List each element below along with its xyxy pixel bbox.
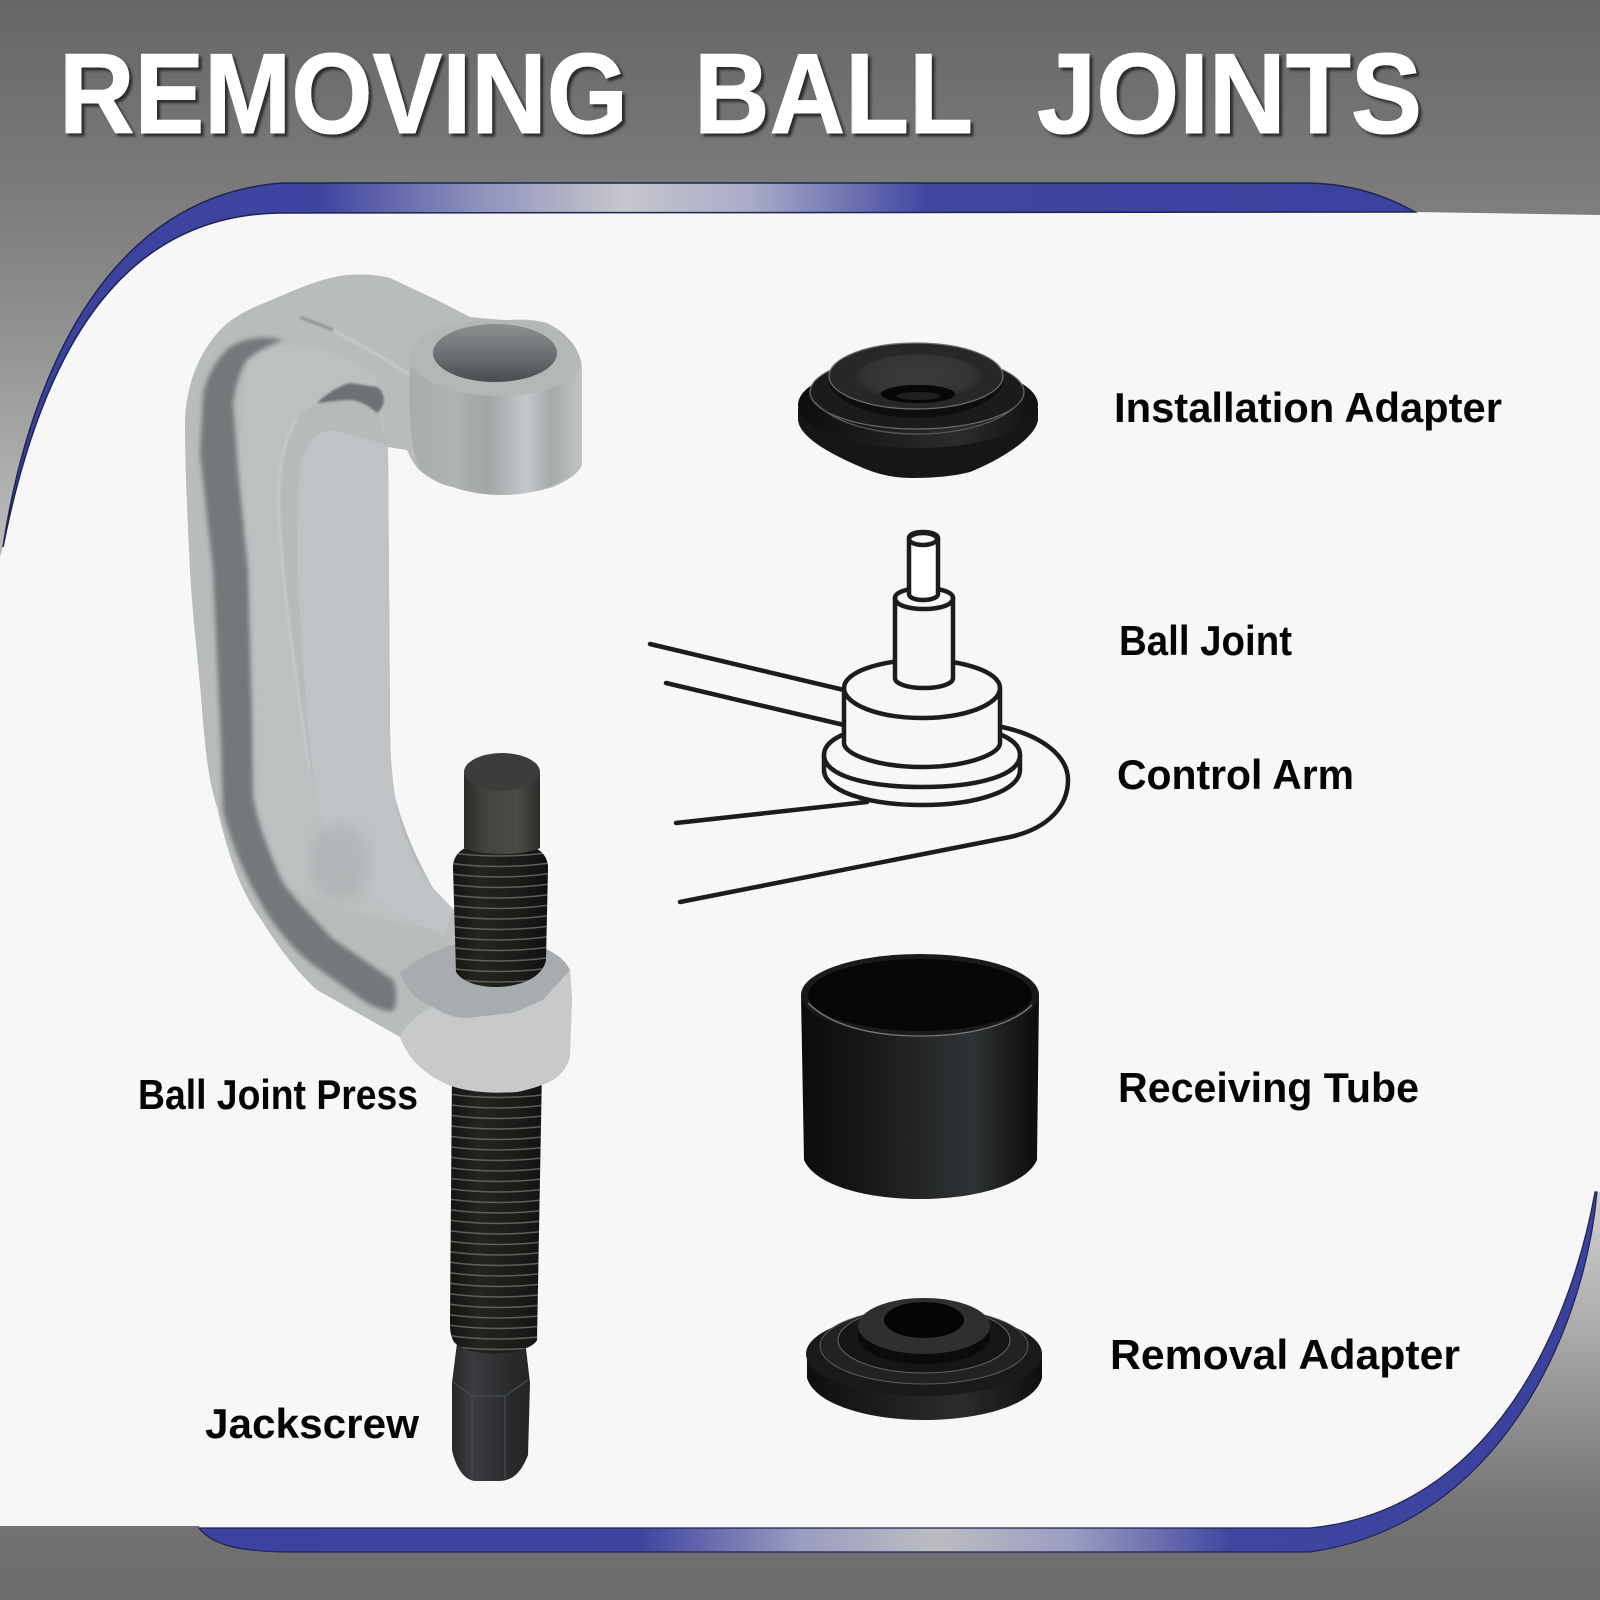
rib <box>279 400 433 888</box>
notch <box>317 383 384 413</box>
jackscrew: lower shaft and hex end <box>450 1070 542 1481</box>
screw hex end <box>452 1335 530 1481</box>
lower boss front <box>400 970 572 1093</box>
pin <box>909 532 938 600</box>
crease <box>279 420 310 770</box>
worn patch <box>314 828 368 895</box>
upper boss top <box>413 332 582 396</box>
second step <box>810 355 1024 429</box>
lower threaded shaft <box>450 1070 542 1354</box>
bottom blue swoosh band <box>199 1192 1597 1552</box>
center hole <box>881 385 955 403</box>
part: removal adapter <box>806 1298 1042 1420</box>
ball joint press: C-clamp frame <box>185 274 582 1093</box>
title <box>59 31 1422 158</box>
bolt hole <box>433 324 557 382</box>
lower boss top face <box>400 940 570 1018</box>
top ridge <box>300 317 333 330</box>
control arm lines <box>650 644 1068 902</box>
web face <box>388 466 429 880</box>
cone recess <box>855 354 983 402</box>
label: installation adapter: Installation Adapter <box>1114 384 1502 431</box>
neck <box>895 588 953 688</box>
outer groove <box>200 338 396 1011</box>
upper boss side <box>410 365 582 495</box>
center hole <box>884 1302 964 1338</box>
top blue swoosh band <box>3 183 1415 547</box>
title: JOINTS <box>1037 31 1422 158</box>
diagram: ball joint and control arm <box>650 532 1068 902</box>
top ring <box>858 1298 990 1354</box>
middle disc <box>844 660 1000 767</box>
label: ball joint press: Ball Joint Press <box>138 1071 418 1118</box>
part: installation adapter <box>798 343 1038 478</box>
label: removal adapter: Removal Adapter <box>1110 1331 1460 1378</box>
screw tip face <box>464 753 540 791</box>
base rim <box>798 362 1038 448</box>
label: ball joint: Ball Joint <box>1119 617 1292 664</box>
part: receiving tube <box>801 954 1039 1199</box>
label: receiving tube: Receiving Tube <box>1118 1064 1419 1111</box>
inner face <box>297 430 453 935</box>
label: control arm: Control Arm <box>1117 751 1354 798</box>
screw tip side <box>464 772 540 854</box>
title: BALL <box>694 31 973 158</box>
title: REMOVING <box>59 31 628 158</box>
label: jackscrew: Jackscrew <box>205 1400 419 1447</box>
flange <box>824 723 1020 805</box>
upper threaded shaft <box>453 842 548 987</box>
jackscrew: upper thread and tip <box>453 753 548 987</box>
top lip <box>829 382 1003 418</box>
